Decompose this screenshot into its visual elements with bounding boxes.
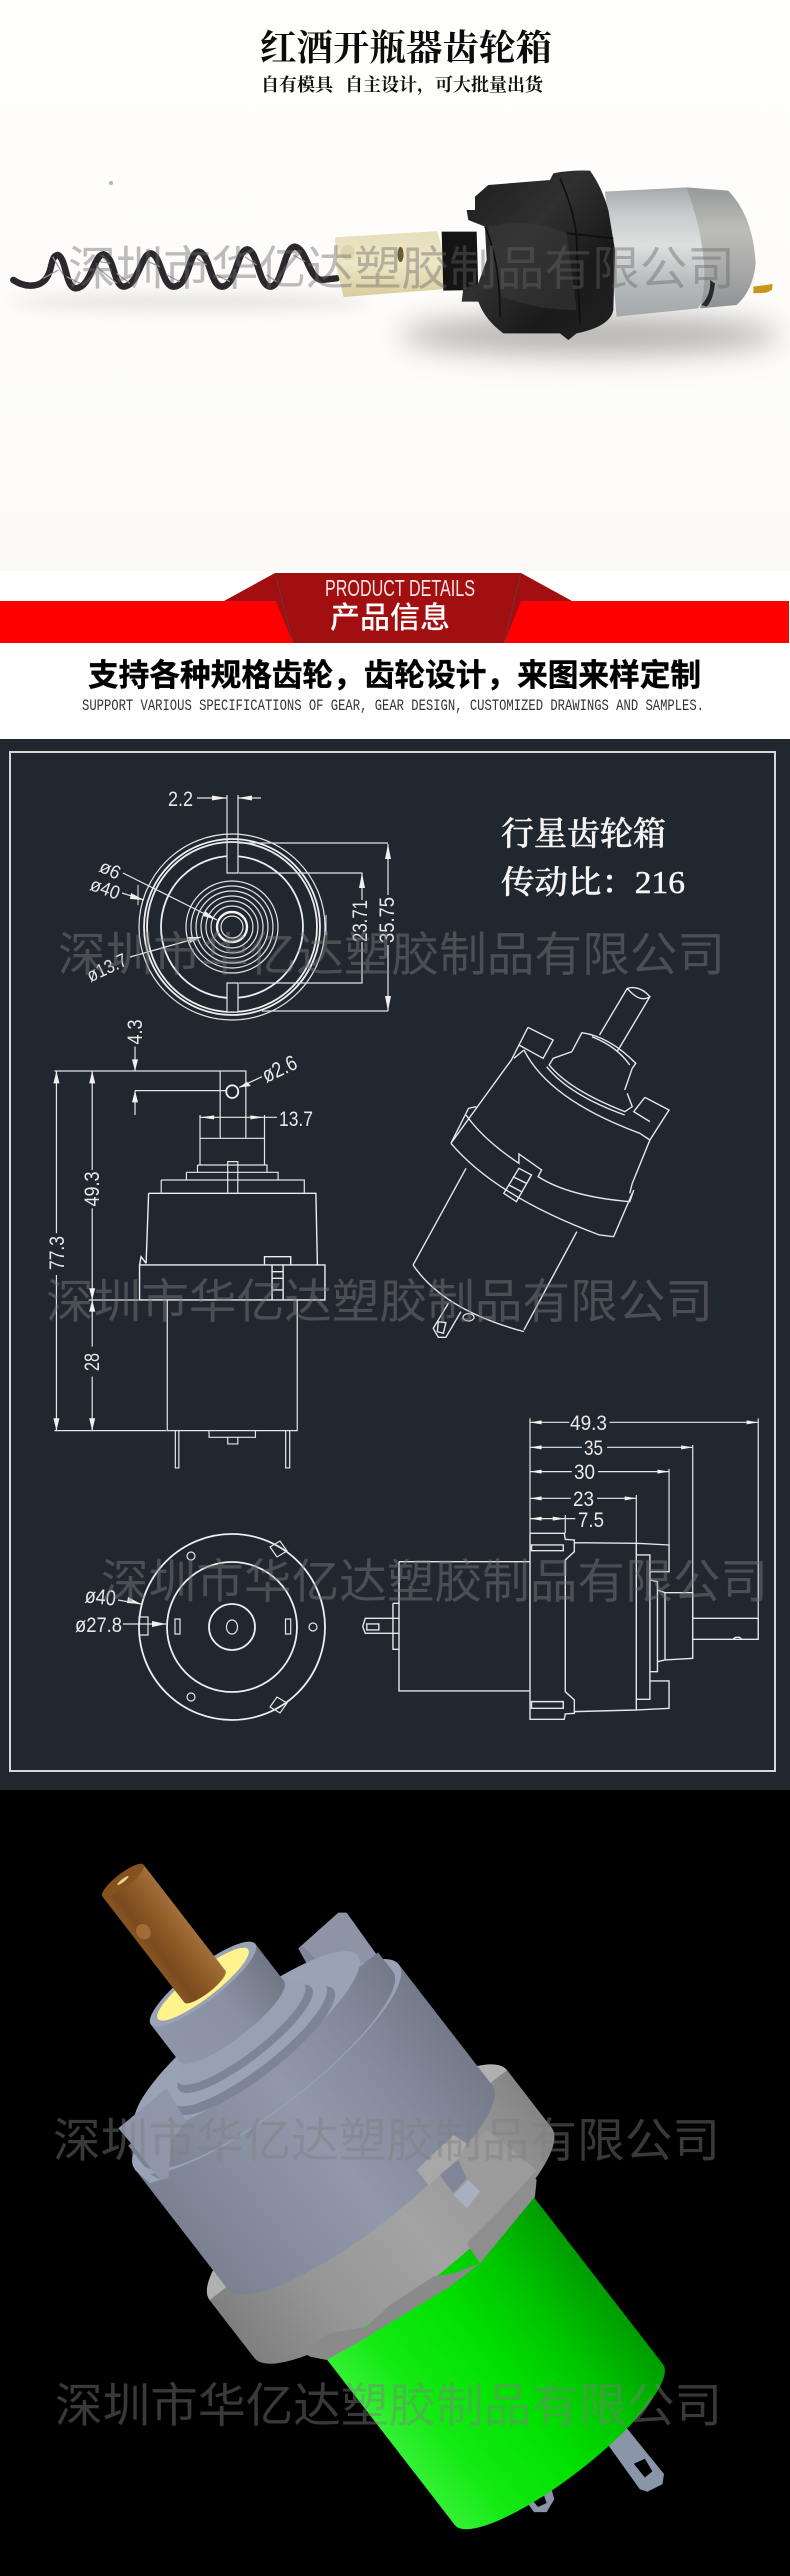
dimension 28: 28 [80, 1353, 104, 1371]
photo shadow: motor [400, 315, 780, 355]
panel: product details banner [0, 571, 790, 739]
dimension 77.3: 77.3 [45, 1236, 69, 1270]
drawing: top view with dimensions [84, 787, 399, 1020]
drawing: bottom view with dimensions [75, 1534, 325, 1720]
spec text: planetary gearbox: 行星齿轮箱 [501, 816, 666, 853]
label diameter 13.7: ø13.7 [84, 950, 131, 987]
label diameter 40: ø40 [84, 1583, 117, 1611]
watermark: 深圳市华亿达塑胶制品有限公司 [101, 1555, 768, 1608]
red band [0, 601, 789, 643]
spec text: planetary gearbox: 传动比：216 [501, 864, 685, 900]
watermark: 深圳市华亿达塑胶制品有限公司 [68, 242, 735, 295]
spec text: planetary gearbox [501, 816, 685, 900]
dimension 7.5: 7.5 [578, 1508, 604, 1532]
photo: corkscrew [13, 247, 337, 288]
photo: plastic coupling [335, 231, 446, 297]
dimension 49.3: 49.3 [80, 1171, 104, 1206]
dimension 49.3: 49.3 [570, 1411, 607, 1435]
banner chinese heading: 产品信息 [330, 602, 450, 635]
dimension 2.2: 2.2 [168, 787, 193, 811]
photo: motor and black gearbox [442, 171, 773, 340]
watermark: 深圳市华亿达塑胶制品有限公司 [53, 2114, 720, 2167]
green motor [320, 2190, 683, 2551]
label diameter 27.8: ø27.8 [75, 1613, 122, 1637]
label diameter 6: ø6 [96, 856, 124, 884]
output shaft [98, 1859, 230, 2008]
title: 红酒开瓶器齿轮箱 [260, 28, 552, 68]
3D model: latch and band detail [300, 2130, 537, 2360]
panel: CAD drawing [0, 739, 790, 1790]
3D model: rear lug [298, 1913, 382, 1978]
dimension 35.75: 35.75 [375, 897, 399, 943]
panel: product photo [0, 0, 790, 571]
3D model: front lug [118, 2088, 187, 2183]
dimension 4.3: 4.3 [123, 1019, 147, 1044]
drawing: front view with dimensions [363, 1411, 758, 1719]
label diameter 40: ø40 [87, 874, 123, 904]
gray flange band [181, 2033, 580, 2395]
label diameter 2.6: ø2.6 [258, 1051, 301, 1088]
subtitle: 自主设计，可大批量出货 [345, 74, 546, 96]
subtitle: 自有模具 [261, 75, 336, 95]
drawing: isometric view [413, 988, 669, 1337]
dimension 30: 30 [574, 1460, 595, 1484]
dimension 13.7: 13.7 [279, 1107, 313, 1131]
dimension 23: 23 [573, 1487, 594, 1511]
gearbox body [94, 1911, 518, 2323]
watermark: 深圳市华亿达塑胶制品有限公司 [46, 1275, 713, 1328]
banner english heading: PRODUCT DETAILS [325, 575, 475, 601]
panel: 3D render [0, 1760, 790, 2576]
drawing: side view with dimensions [45, 1019, 325, 1468]
dark red ribbon [224, 573, 572, 643]
3D model: motor terminals [526, 2426, 664, 2512]
tagline: 支持各种规格齿轮，齿轮设计，来图来样定制 [88, 658, 701, 693]
watermark: 深圳市华亿达塑胶制品有限公司 [55, 2379, 722, 2432]
dimension 35: 35 [584, 1436, 603, 1460]
watermark: 深圳市华亿达塑胶制品有限公司 [58, 928, 725, 981]
dimension 23.71: 23.71 [348, 900, 372, 942]
3D model: gearbox cylinders [0, 1760, 728, 2576]
collar [140, 1930, 294, 2075]
photo shadow: corkscrew [10, 296, 370, 308]
